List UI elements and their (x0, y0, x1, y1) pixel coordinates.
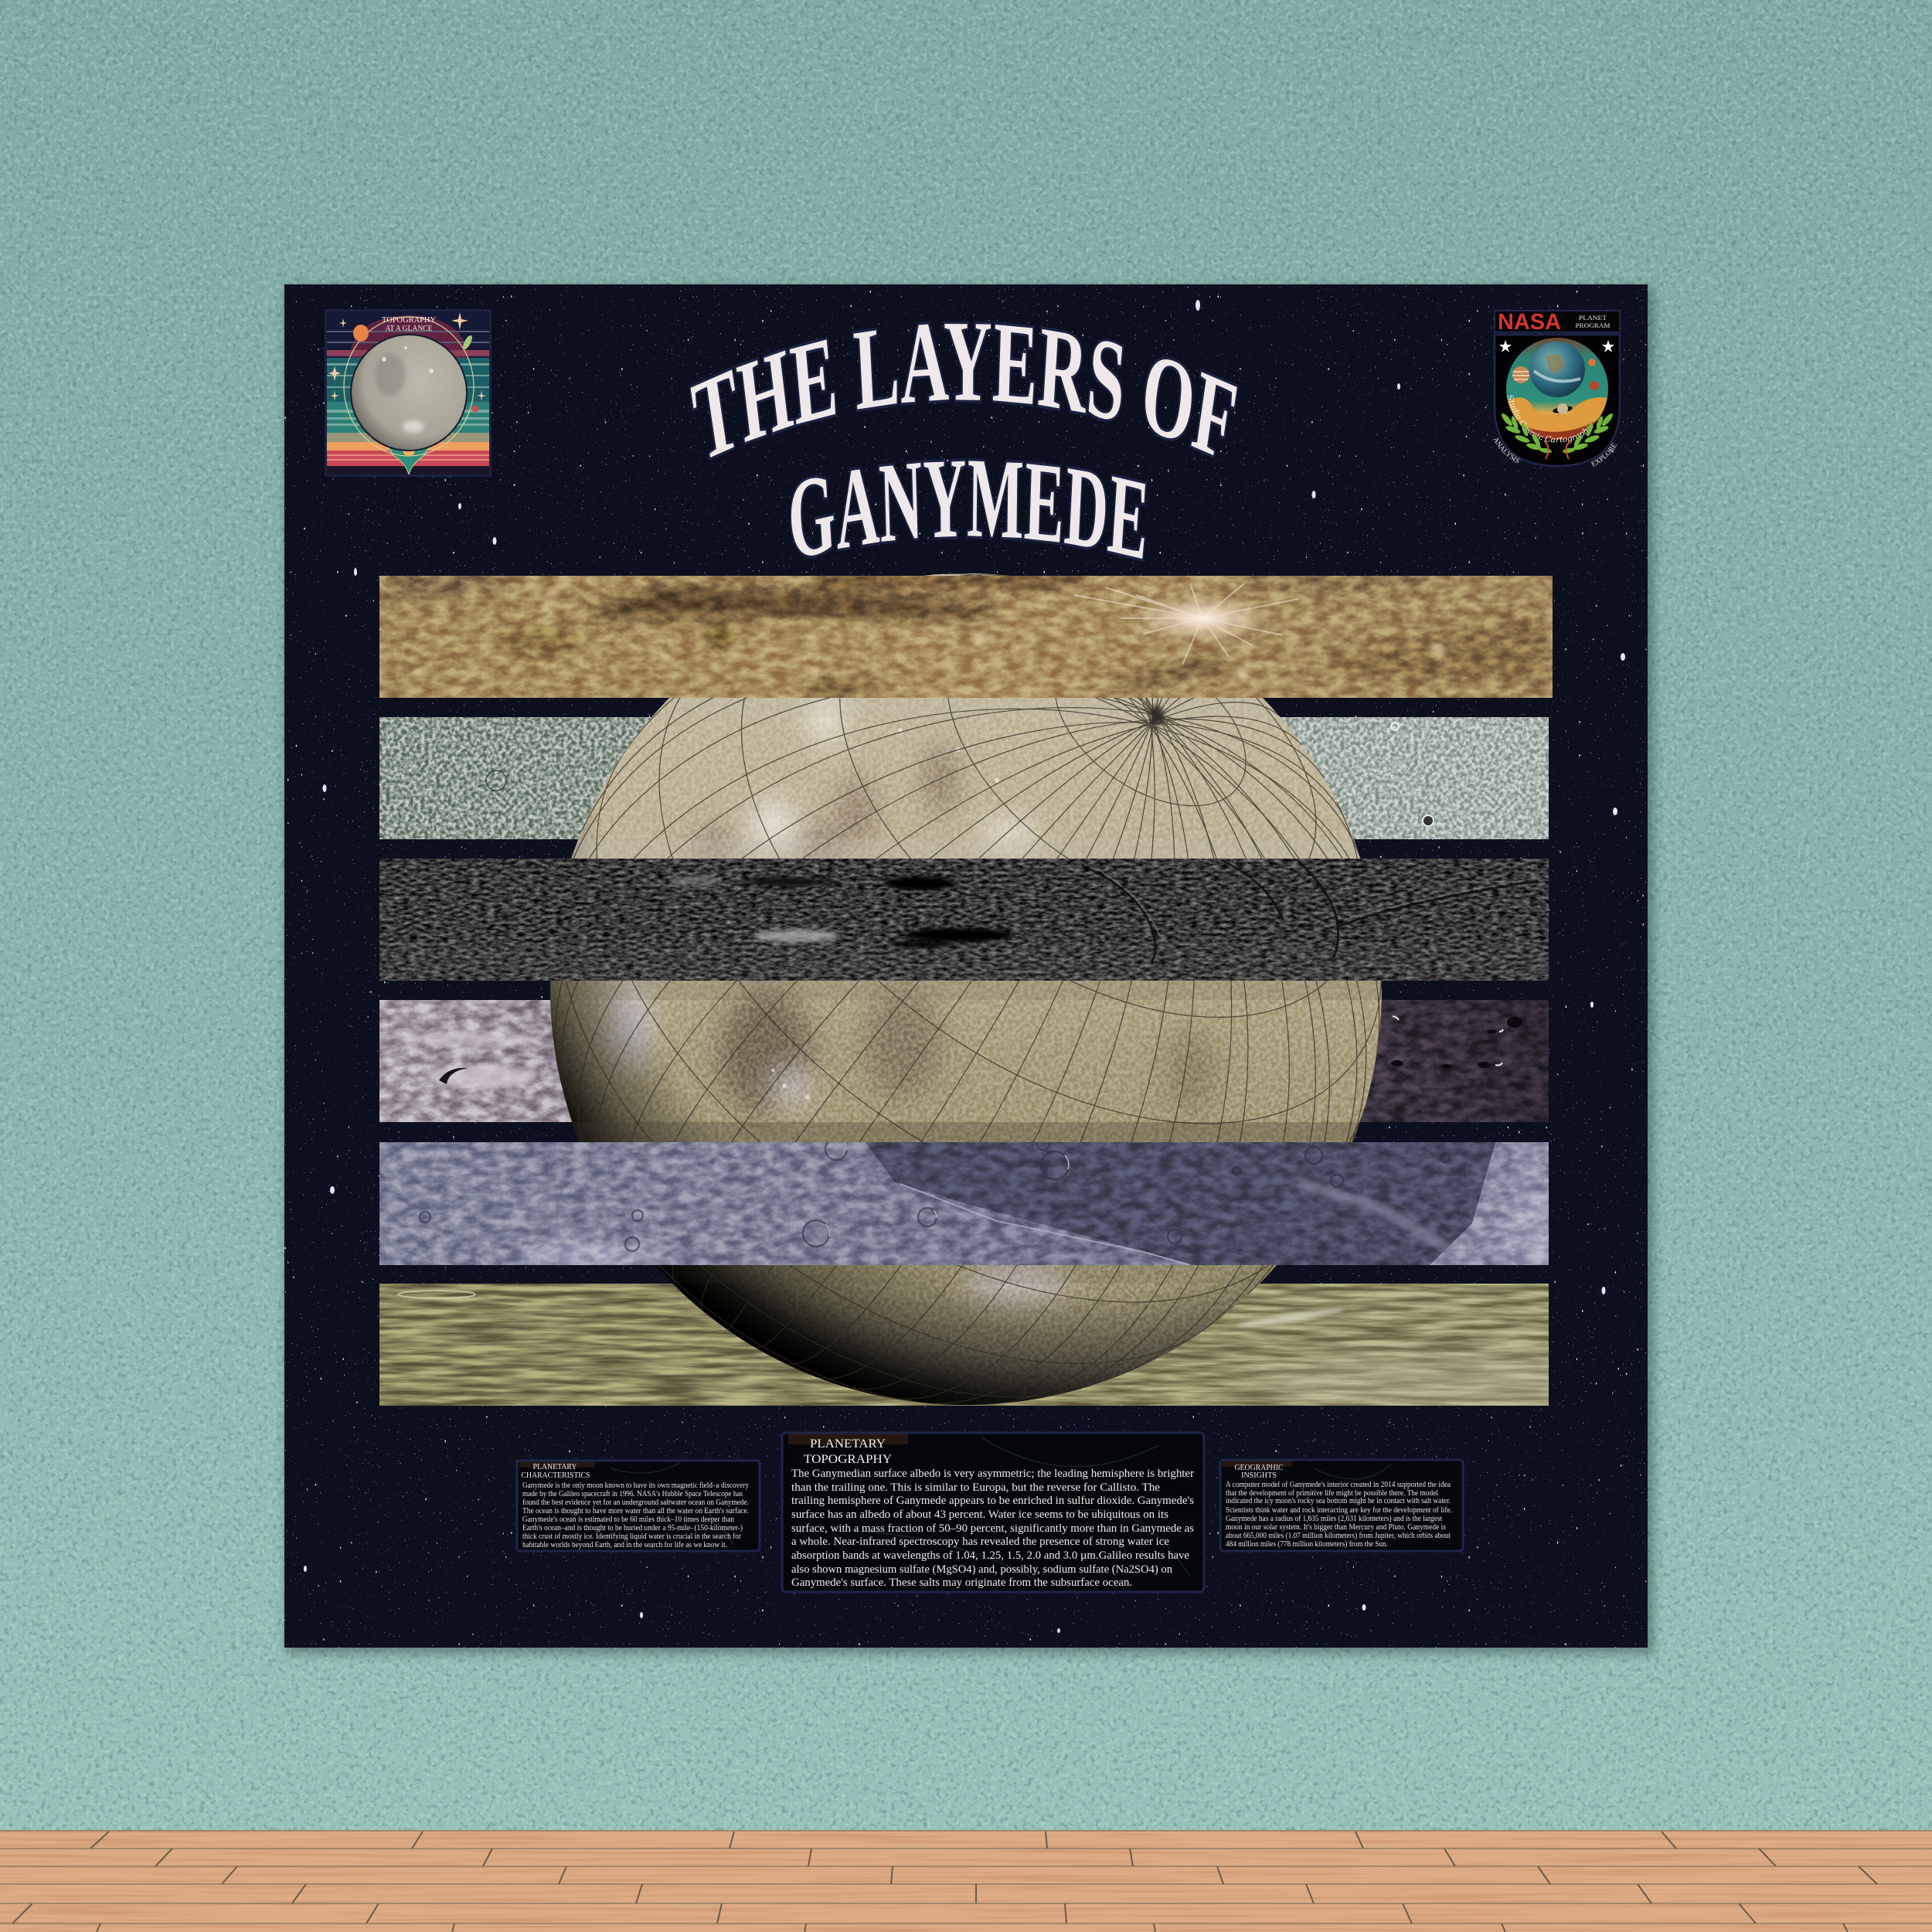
moon albedo patches (606, 685, 1214, 1303)
body text: thick crust of mostly ice. Identifying liquid water is crucial in the search for (522, 1532, 742, 1541)
body text: that the development of primitive life might be possible there. The model (1226, 1489, 1438, 1498)
patch header (1495, 310, 1620, 335)
body text: absorption bands at wavelengths of 1.04, 1.25, 1.5, 2.0 and 3.0 µm.Galileo results have (791, 1549, 1189, 1562)
heading: GEOGRAPHIC (1235, 1464, 1283, 1472)
poster starfield background (284, 284, 1648, 1648)
body text: 484 million miles (778 million kilometers) from the Sun. (1226, 1540, 1388, 1549)
thumbnail heading text: TOPOGRAPHY (382, 315, 436, 325)
body text: The Ganymedian surface albedo is very asymmetric; the leading hemisphere is brighter (791, 1468, 1194, 1480)
body text (791, 1468, 1194, 1589)
band 3: dark grey terrain with craters (379, 859, 1549, 981)
thumbnail heading text: AT A GLANCE (385, 324, 433, 333)
body text: also shown magnesium sulfate (MgSO4) and, possibly, sodium sulfate (Na2SO4) on (791, 1563, 1172, 1576)
panel: planetary characteristics (517, 1461, 760, 1551)
body text: trailing hemisphere of Ganymede appears to be enriched in sulfur dioxide. Ganymede's (791, 1495, 1194, 1507)
body text: a whole. Near-infrared spectroscopy has revealed the presence of strong water ice (791, 1536, 1169, 1548)
heading: INSIGHTS (1241, 1471, 1277, 1480)
badge: topography at a glance (325, 309, 492, 477)
patch curved labels (1491, 436, 1619, 469)
patch illustration (1506, 338, 1608, 440)
patch header: PROGRAM (1575, 321, 1611, 329)
band 1: brown surface with ray crater (379, 560, 1553, 698)
wooden floor (0, 1830, 1932, 1932)
body text (522, 1481, 749, 1549)
ray crater (1074, 583, 1298, 665)
heading: TOPOGRAPHY (804, 1453, 892, 1466)
title (685, 297, 1244, 584)
patch shield (1495, 335, 1620, 466)
patch header: NASA (1498, 310, 1561, 335)
badge: NASA planet program patch (1491, 310, 1620, 469)
body text: Earth's ocean–and is thought to be buried under a 95-mile- (150-kilometer-) (522, 1524, 743, 1532)
body text: The ocean is thought to have more water than all the water on Earth's surface. (522, 1507, 749, 1515)
body text: about 665,000 miles (1.07 million kilometers) from Jupiter, which orbits about (1226, 1532, 1451, 1540)
body text: Ganymede's surface. These salts may originate from the subsurface ocean. (791, 1577, 1132, 1589)
body text: habitable worlds beyond Earth, and in the search for life as we know it. (522, 1541, 727, 1549)
body text: Scientists think water and rock interacting are key for the development of life. (1226, 1506, 1452, 1515)
band 6: olive terrain (379, 1284, 1623, 1410)
poster drop shadow (286, 287, 1654, 1654)
heading: PLANETARY (810, 1437, 886, 1451)
body text: A computer model of Ganymede's interior created in 2014 supported the idea (1226, 1481, 1451, 1489)
body text: Ganymede's ocean is estimated to be 60 miles thick–10 times deeper than (522, 1515, 734, 1524)
globe of Ganymede with grid (550, 573, 1382, 1405)
body text (1226, 1481, 1452, 1549)
patch laurels (1500, 412, 1614, 454)
patch motto: Studio Cosmic Cartographic (1507, 396, 1594, 444)
body text: surface has an albedo of about 43 percent. Water ice seems to be ubiquitous on its (791, 1509, 1168, 1521)
thumbnail heading text (382, 315, 436, 333)
title line 1: THE LAYERS OF (689, 321, 1239, 461)
heading (804, 1437, 892, 1466)
title line 2: GANYMEDE (790, 458, 1147, 562)
patch curved labels: EXPLORE (1590, 442, 1619, 469)
body text: indicated the icy moon's rocky sea bottom might be in contact with salt water. (1226, 1497, 1451, 1505)
moon translucent gap strips (541, 698, 1391, 1284)
body text: found the best evidence yet for an underground saltwater ocean on Ganymede. (522, 1498, 749, 1507)
band 2: green-grey terrain (379, 717, 1549, 839)
body text: made by the Galileo spacecraft in 1996. NASA's Hubble Space Telescope has (522, 1490, 743, 1498)
heading (521, 1463, 590, 1480)
panel: planetary topography (782, 1433, 1204, 1592)
patch curved labels: ANALYSIS (1491, 436, 1521, 465)
heading: CHARACTERISTICS (521, 1471, 590, 1480)
panel: geographic insights (1220, 1460, 1463, 1551)
body text: Ganymede has a radius of 1,635 miles (2,631 kilometers) and is the largest (1226, 1515, 1442, 1523)
heading: PLANETARY (533, 1463, 577, 1471)
body text: moon in our solar system. It's bigger than Mercury and Pluto. Ganymede is (1226, 1523, 1446, 1532)
body text: surface, with a mass fraction of 50–90 percent, significantly more than in Ganymede as (791, 1522, 1194, 1535)
patch stars (1499, 340, 1614, 352)
heading (1235, 1464, 1283, 1480)
band 4: purple-grey terrain (379, 1000, 1549, 1122)
band 5: blue-grey terrain with dark plate (379, 1138, 1573, 1271)
body text: than the trailing one. This is similar to Europa, but the reverse for Callisto. The (791, 1481, 1160, 1494)
moon lat-long grid lines (387, 410, 1545, 1568)
thumbnail moon (352, 335, 466, 450)
patch header: PLANET (1579, 314, 1607, 321)
body text: Ganymede is the only moon known to have its own magnetic field–a discovery (522, 1481, 749, 1490)
